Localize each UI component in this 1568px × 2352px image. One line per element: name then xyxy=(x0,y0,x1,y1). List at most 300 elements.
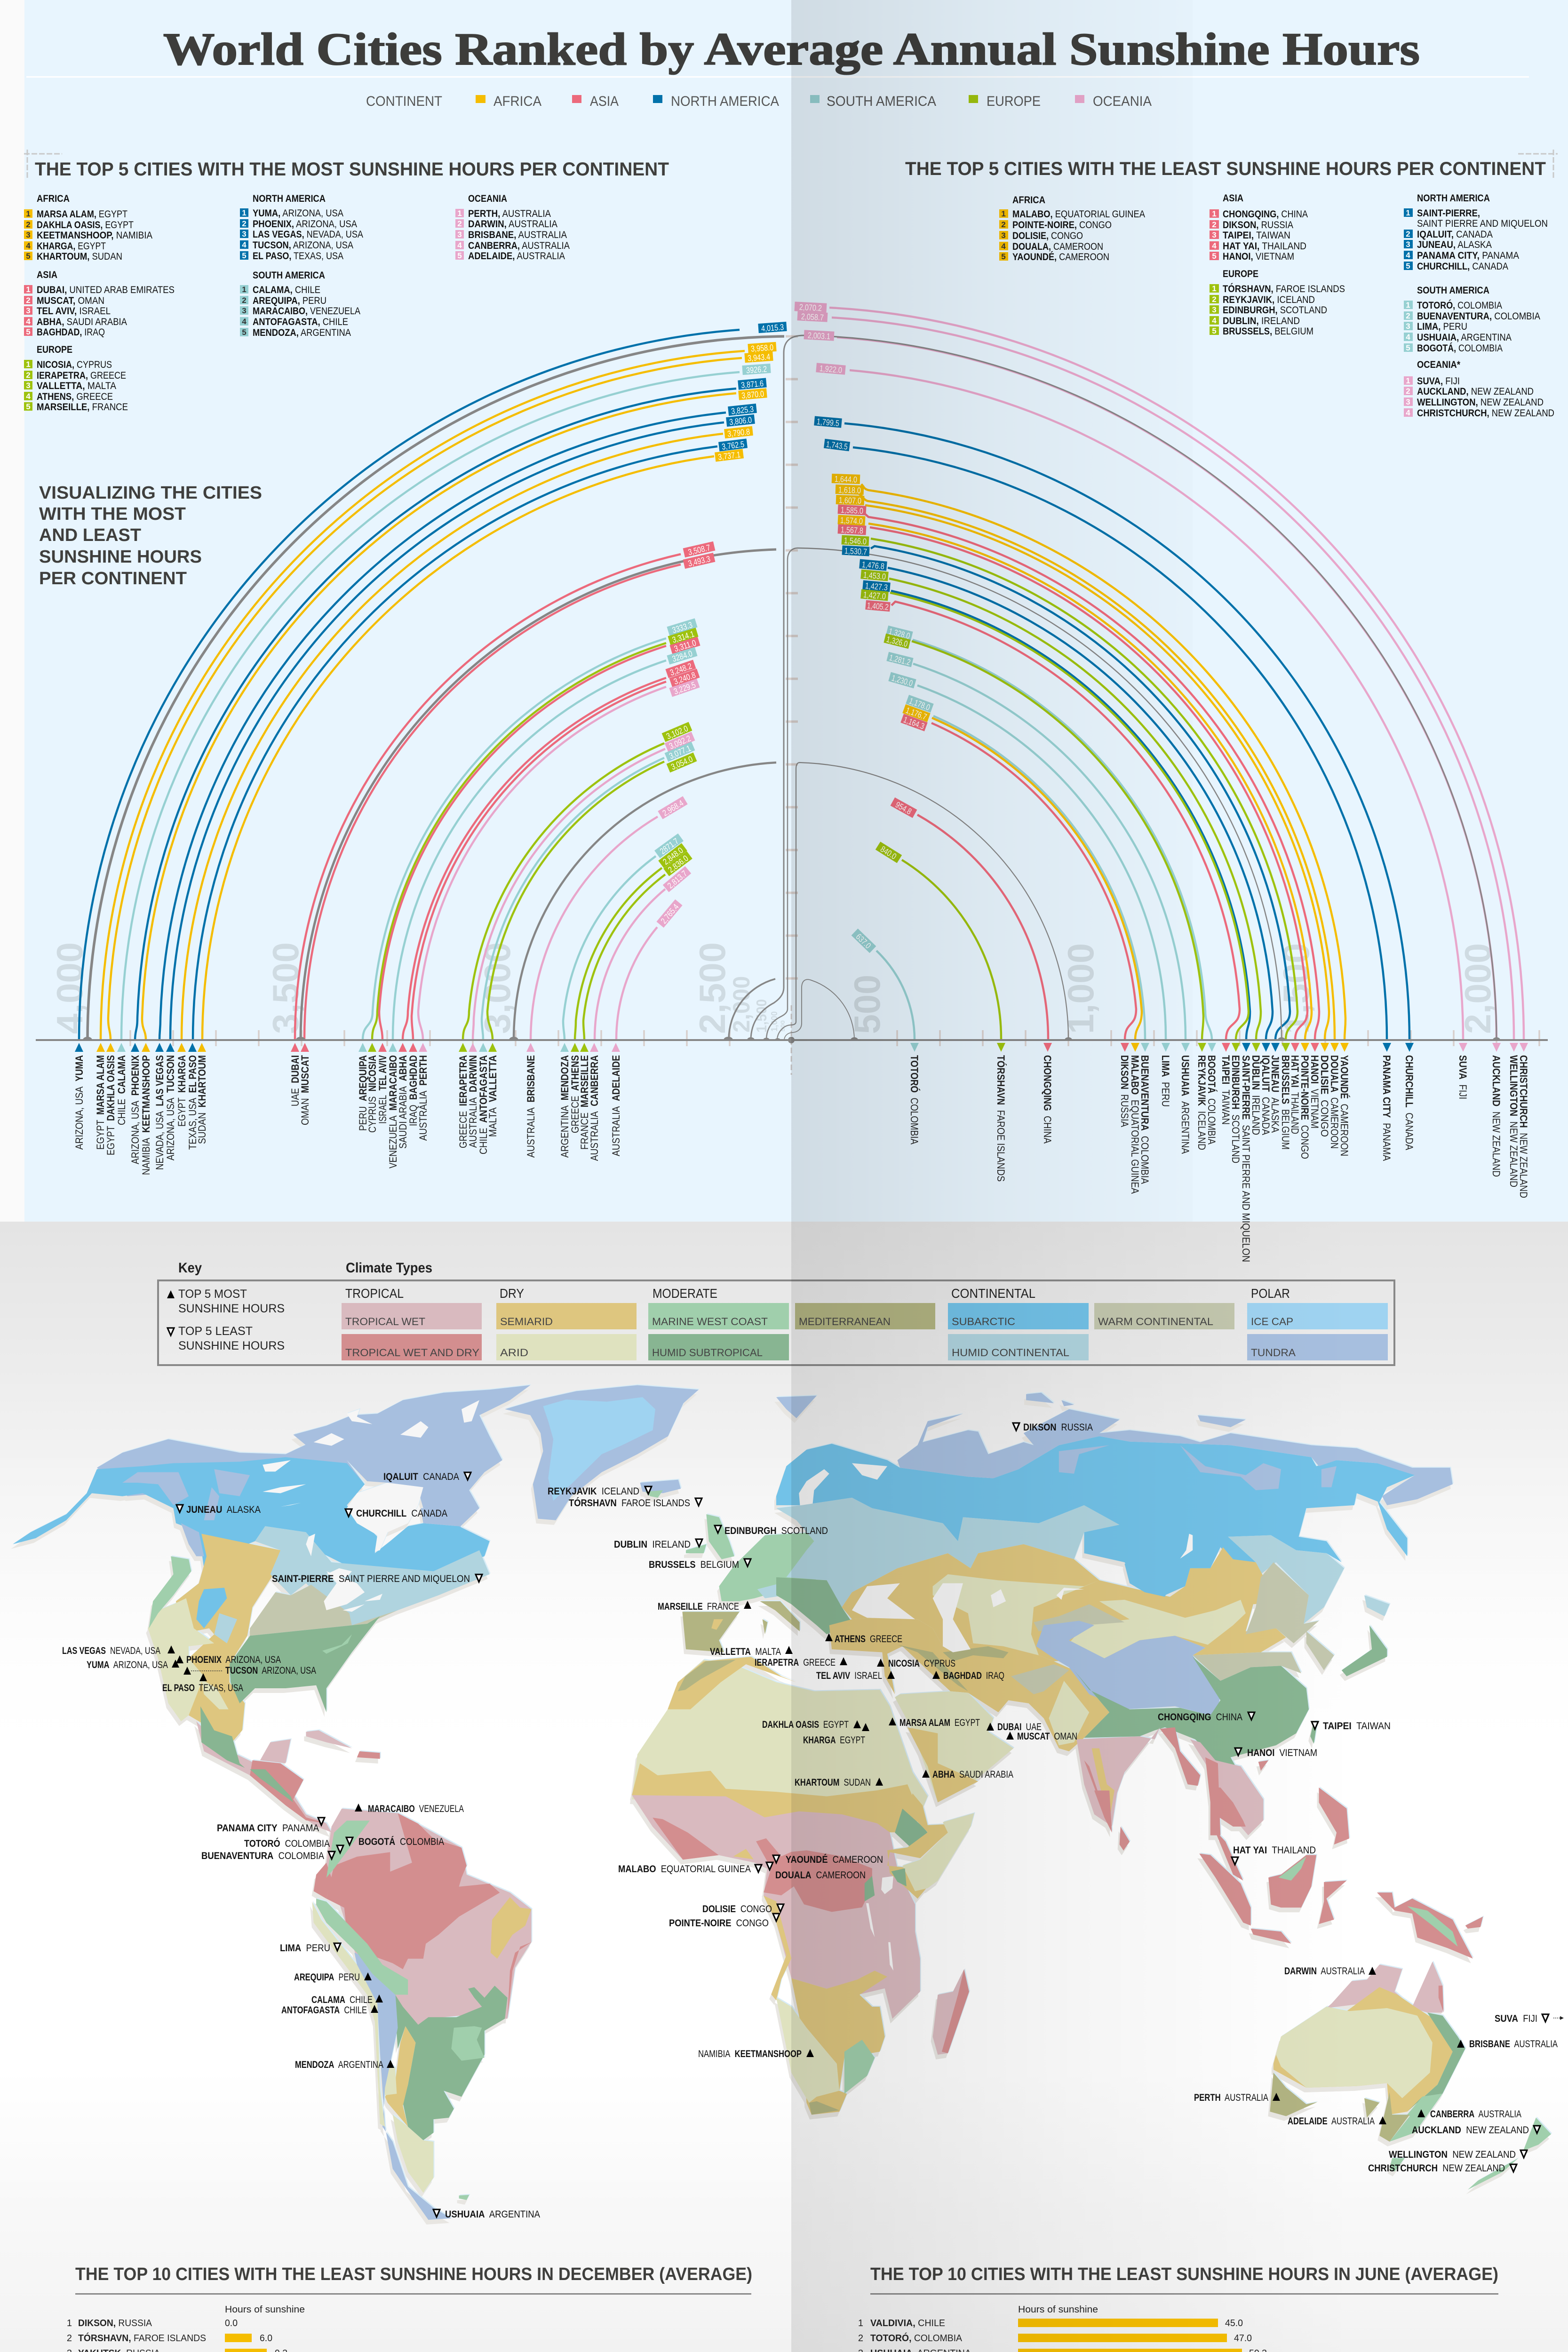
list: least sunshine, Europe: REYKJAVIK, ICELAND xyxy=(1223,294,1315,305)
value labels: most sunshine: 3,102.0 xyxy=(665,723,689,741)
value labels: most sunshine: 3,229.5 xyxy=(672,680,697,696)
value labels: least sunshine: 1,427.0 xyxy=(863,590,886,601)
text block: visualizing xyxy=(39,483,262,588)
list: most sunshine, North America: 1 xyxy=(242,208,247,217)
map city labels: Americas: USHUAIA ARGENTINA xyxy=(445,2209,540,2220)
axis scale numerals: 2,500 xyxy=(692,942,733,1034)
map city labels: Americas: CALAMA CHILE xyxy=(311,1994,373,2005)
list: least sunshine, Africa: 4 xyxy=(1001,242,1006,251)
map city labels: Europe: NICOSIA CYPRUS xyxy=(888,1658,955,1669)
list: least sunshine, Oceania: 3 xyxy=(1406,397,1410,406)
climate types heading: Climate Types xyxy=(346,1260,432,1276)
vertical city labels: least sunshine: LIMA PERU xyxy=(1160,1055,1171,1107)
vertical city labels: least sunshine: SUVA FIJI xyxy=(1457,1055,1469,1099)
list: most sunshine, South America: 3 xyxy=(242,306,247,315)
value labels: least sunshine: 1,405.2 xyxy=(867,601,889,612)
value labels: least sunshine: 2,058.7 xyxy=(801,312,824,322)
value labels: most sunshine: 3,240.8 xyxy=(672,670,697,686)
key panel xyxy=(158,1280,1394,1365)
map city labels: Americas: PHOENIX ARIZONA, USA xyxy=(186,1654,281,1665)
list: most sunshine, Asia: 5 xyxy=(26,327,31,336)
vertical city labels: least sunshine: DOLISIE CONGO xyxy=(1319,1055,1330,1137)
list: most sunshine, Asia: 4 xyxy=(26,317,31,326)
list: most sunshine, Africa: KHARGA, EGYPT xyxy=(37,241,106,252)
list: least sunshine, North America: SAINT-PIERRE, xyxy=(1417,208,1480,219)
vertical city labels: most sunshine: OMAN MUSCAT xyxy=(299,1055,311,1125)
axis scale numerals: 1,000 xyxy=(1060,943,1101,1034)
list: most sunshine, North America: 3 xyxy=(242,230,247,238)
list: least sunshine, South America: 2 xyxy=(1406,311,1410,320)
heading: least sunshine in June: THE TOP 10 CITIES WITH THE LEAST SUNSHINE HOURS IN JUNE (AVERAGE) xyxy=(870,2265,1498,2284)
value labels: least sunshine xyxy=(794,302,934,954)
map city labels: Oceania: AUCKLAND NEW ZEALAND xyxy=(1412,2125,1529,2136)
list: least sunshine, South America: LIMA, PERU xyxy=(1417,321,1467,332)
vertical city labels: most sunshine: AUSTRALIA ADELAIDE xyxy=(610,1055,622,1156)
map city labels: Americas: LIMA PERU xyxy=(280,1943,330,1954)
title: World Cities Ranked by Average Annual Sunshine Hours xyxy=(163,24,1420,74)
list: most sunshine, Asia: 2 xyxy=(26,296,31,305)
legend: continent colours: CONTINENT xyxy=(366,94,442,109)
map city labels: Africa: DOLISIE CONGO xyxy=(702,1904,772,1915)
list: least sunshine, South America: BUENAVENTURA, COLOMBIA xyxy=(1417,311,1540,322)
value labels: most sunshine: 3333.3 xyxy=(671,620,693,635)
list: least sunshine, South America: 1 xyxy=(1406,301,1410,310)
value labels: least sunshine: 1,178.0 xyxy=(908,696,931,712)
list: least sunshine, South America: 3 xyxy=(1406,322,1410,331)
axis scale numerals: 1,000 xyxy=(770,1011,779,1032)
axis arrows: least sunshine xyxy=(910,1043,1528,1052)
climate swatches: TROPICAL WET xyxy=(345,1316,425,1327)
list: most sunshine, South America: CALAMA, CHILE xyxy=(253,285,320,295)
list: most sunshine, Oceania: 2 xyxy=(457,219,462,228)
map city labels: Oceania: BRISBANE AUSTRALIA xyxy=(1469,2039,1558,2050)
vertical city labels: most sunshine: ARGENTINA MENDOZA xyxy=(559,1055,571,1158)
value labels: most sunshine: 3,508.7 xyxy=(687,543,711,557)
grey scale arcs xyxy=(88,335,1496,1040)
climate swatches: TUNDRA xyxy=(1251,1347,1296,1359)
list: most sunshine, Africa xyxy=(24,193,152,262)
value labels: most sunshine: 3,314.1 xyxy=(671,629,695,645)
legend: continent colours: ASIA xyxy=(590,94,619,109)
list: most sunshine, Europe: 1 xyxy=(26,360,31,369)
list: most sunshine, North America xyxy=(240,193,363,262)
heading: least sunshine in December: THE TOP 10 CITIES WITH THE LEAST SUNSHINE HOURS IN DECEMBER (AVERAGE) xyxy=(75,2265,752,2284)
axis arrows: most sunshine xyxy=(75,1043,620,1052)
axis scale numerals: 3,000 xyxy=(477,942,518,1034)
list: most sunshine, South America xyxy=(240,270,360,338)
map city labels: Asia: ABHA SAUDI ARABIA xyxy=(932,1769,1013,1780)
map city labels: Europe: TÓRSHAVN FAROE ISLANDS xyxy=(569,1497,690,1509)
page background: map panel xyxy=(0,1222,1568,2352)
list: most sunshine, Europe: VALLETTA, MALTA xyxy=(37,381,116,391)
list: most sunshine, Europe: 5 xyxy=(26,402,31,411)
vertical city labels: most sunshine: AUSTRALIA BRISBANE xyxy=(525,1055,537,1158)
axis scale numerals: 500 xyxy=(780,1020,786,1032)
vertical city labels: most sunshine xyxy=(73,1055,622,1175)
vertical city labels: most sunshine: MALTA VALLETTA xyxy=(487,1055,499,1137)
vertical city labels: least sunshine: WELLINGTON NEW ZEALAND xyxy=(1508,1055,1520,1187)
map city labels: Asia: HANOI VIETNAM xyxy=(1247,1748,1317,1758)
list: most sunshine, South America: MARACAIBO, VENEZUELA xyxy=(253,306,360,317)
list: most sunshine, North America: 4 xyxy=(242,240,247,249)
list: most sunshine, Africa: 5 xyxy=(26,252,31,261)
list: least sunshine, Europe: 2 xyxy=(1212,295,1217,304)
bar chart: June: VALDIVIA, CHILE xyxy=(870,2318,945,2328)
map city labels: Americas: YUMA ARIZONA, USA xyxy=(87,1660,168,1670)
list: most sunshine, Asia: DUBAI, UNITED ARAB EMIRATES xyxy=(37,285,175,295)
list: least sunshine, Africa: 2 xyxy=(1001,220,1006,229)
axis scale numerals: 500 xyxy=(846,975,888,1034)
vertical city labels: least sunshine xyxy=(908,1055,1529,1262)
list: least sunshine, Oceania xyxy=(1404,359,1554,419)
value labels: least sunshine: 1,281.2 xyxy=(888,653,911,667)
list: least sunshine, North America: PANAMA CITY, PANAMA xyxy=(1417,250,1519,261)
vertical city labels: least sunshine: USHUAIA ARGENTINA xyxy=(1179,1055,1191,1154)
list: least sunshine, Oceania: SUVA, FIJI xyxy=(1417,376,1460,387)
value labels: most sunshine: 3,311.0 xyxy=(673,638,697,654)
list: most sunshine, Asia: BAGHDAD, IRAQ xyxy=(37,327,105,338)
value labels: most sunshine: 3,077.1 xyxy=(668,743,692,761)
vertical city labels: least sunshine: BUENAVENTURA COLOMBIA xyxy=(1139,1055,1151,1184)
vertical city labels: least sunshine: HAT YAI THAILAND xyxy=(1289,1055,1301,1134)
list: most sunshine, South America: MENDOZA, ARGENTINA xyxy=(253,327,351,338)
value labels: least sunshine: 1,922.0 xyxy=(819,364,843,375)
text block: visualizing: WITH THE MOST xyxy=(39,504,186,524)
climate category headings: POLAR xyxy=(1251,1286,1290,1301)
list: least sunshine, North America: 5 xyxy=(1406,262,1410,270)
map city labels: Americas: AREQUIPA PERU xyxy=(294,1972,360,1983)
vertical city labels: most sunshine: EGYPT MARSA ALAM xyxy=(95,1055,106,1150)
list: most sunshine, Asia: ASIA xyxy=(37,270,57,280)
list: least sunshine, Europe: 5 xyxy=(1212,326,1217,335)
key heading: Key xyxy=(178,1260,202,1276)
vertical city labels: most sunshine: CHILE ANTOFAGASTA xyxy=(478,1055,489,1154)
map city labels: Africa: YAOUNDÉ CAMEROON xyxy=(786,1854,883,1865)
list: most sunshine, Africa: MARSA ALAM, EGYPT xyxy=(37,209,127,220)
value labels: most sunshine: 2871.7 xyxy=(658,836,680,856)
climate category headings xyxy=(345,1286,1290,1301)
list: least sunshine, Africa: 3 xyxy=(1001,231,1006,240)
vertical city labels: least sunshine: TÓRSHAVN FAROE ISLANDS xyxy=(995,1055,1007,1182)
climate swatches: MEDITERRANEAN xyxy=(799,1316,891,1327)
value labels: least sunshine: 954.8 xyxy=(894,800,913,816)
value labels: least sunshine: 1,176.7 xyxy=(905,706,928,722)
list: most sunshine, North America: 5 xyxy=(242,251,247,260)
vertical city labels: most sunshine: UAE DUBAI xyxy=(289,1055,301,1106)
map city labels: Americas: BUENAVENTURA COLOMBIA xyxy=(201,1851,324,1861)
map city labels: Americas: LAS VEGAS NEVADA, USA xyxy=(62,1645,160,1656)
map city labels: Europe: ATHENS GREECE xyxy=(835,1634,902,1645)
list: most sunshine, Africa: KHARTOUM, SUDAN xyxy=(37,251,122,262)
bar chart: December: 2 xyxy=(67,2333,72,2344)
map city labels: Americas: SAINT-PIERRE SAINT PIERRE AND MIQUELON xyxy=(272,1573,470,1584)
map city labels: Africa xyxy=(618,1717,980,2059)
vertical city labels: most sunshine: NEVADA, USA LAS VEGAS xyxy=(154,1055,166,1170)
bar chart: December xyxy=(62,2304,362,2352)
vertical city labels: least sunshine: DUBLIN IRELAND xyxy=(1250,1055,1262,1135)
list: least sunshine, Africa: AFRICA xyxy=(1012,195,1045,206)
list: least sunshine, North America: CHURCHILL, CANADA xyxy=(1417,261,1508,272)
axis scale numerals: 4,000 xyxy=(49,942,90,1034)
map city labels: Africa: MARSA ALAM EGYPT xyxy=(899,1717,980,1728)
list: least sunshine, Oceania: AUCKLAND, NEW ZEALAND xyxy=(1417,386,1534,397)
bar chart: December: DIKSON, RUSSIA xyxy=(78,2318,152,2328)
vertical city labels: most sunshine: EGYPT DAKHLA OASIS xyxy=(105,1055,117,1155)
map city labels: Africa: MALABO EQUATORIAL GUINEA xyxy=(618,1864,751,1875)
list: least sunshine, Asia: DIKSON, RUSSIA xyxy=(1223,220,1293,230)
list: least sunshine, Europe: DUBLIN, IRELAND xyxy=(1223,316,1300,326)
bar chart: June: 45.0 xyxy=(1225,2318,1243,2328)
map city labels: Americas: TUCSON ARIZONA, USA xyxy=(225,1665,316,1676)
list: most sunshine, South America: SOUTH AMERICA xyxy=(253,270,325,281)
map city labels: Africa: POINTE-NOIRE CONGO xyxy=(669,1918,769,1929)
vertical city labels: least sunshine: YAOUNDÉ CAMEROON xyxy=(1338,1055,1350,1156)
list: most sunshine, Europe xyxy=(24,344,128,413)
value labels: least sunshine: 1,476.8 xyxy=(861,560,885,571)
list: least sunshine, North America: 2 xyxy=(1406,230,1410,238)
value labels: least sunshine: 1,607.0 xyxy=(839,495,861,506)
map city labels: Europe: MARSEILLE FRANCE xyxy=(658,1601,739,1612)
list: most sunshine, Oceania: ADELAIDE, AUSTRALIA xyxy=(468,251,565,262)
map: Eurasia xyxy=(776,1393,1453,1836)
map city labels: Europe: REYKJAVIK ICELAND xyxy=(548,1486,639,1497)
list: most sunshine, North America: TUCSON, ARIZONA, USA xyxy=(253,240,353,251)
key: top 5 most: TOP 5 MOST xyxy=(178,1287,247,1301)
list: least sunshine, Oceania: 1 xyxy=(1406,376,1410,385)
list: most sunshine, Asia: ABHA, SAUDI ARABIA xyxy=(37,317,127,327)
vertical city labels: most sunshine: AUSTRALIA DARWIN xyxy=(467,1055,479,1148)
value labels: least sunshine: 2,003.1 xyxy=(807,331,830,341)
vertical city labels: least sunshine: MALABO EQUATORIAL GUINEA xyxy=(1129,1055,1141,1194)
legend: continent colours: AFRICA xyxy=(493,94,541,109)
list: least sunshine, Asia: 1 xyxy=(1212,209,1217,218)
vertical city labels: least sunshine: TOTORÓ COLOMBIA xyxy=(908,1055,920,1144)
map city labels: Asia: DIKSON RUSSIA xyxy=(1023,1422,1093,1433)
vertical city labels: most sunshine: SAUDI ARABIA ABHA xyxy=(397,1055,409,1149)
value labels: least sunshine: 1,585.0 xyxy=(840,505,863,516)
climate swatches: ICE CAP xyxy=(1251,1316,1293,1327)
axis scale numerals xyxy=(49,942,1498,1034)
key: top 5 least xyxy=(167,1325,285,1352)
map city labels: Americas: MARACAIBO VENEZUELA xyxy=(368,1804,464,1814)
list: most sunshine, Asia: 3 xyxy=(26,306,31,315)
map city labels: Oceania: PERTH AUSTRALIA xyxy=(1194,2092,1268,2103)
list: least sunshine, South America: SOUTH AMERICA xyxy=(1417,285,1489,296)
text block: visualizing: VISUALIZING THE CITIES xyxy=(39,483,262,503)
map city labels: Africa: DAKHLA OASIS EGYPT xyxy=(762,1719,849,1730)
list: most sunshine, South America: ANTOFAGASTA, CHILE xyxy=(253,317,348,327)
value labels: most sunshine: 3926.2 xyxy=(746,364,767,375)
list: most sunshine, Asia: TEL AVIV, ISRAEL xyxy=(37,306,111,317)
key: top 5 least: TOP 5 LEAST xyxy=(178,1325,253,1338)
legend: continent colours: NORTH AMERICA xyxy=(671,94,779,109)
value labels: least sunshine: 1,427.3 xyxy=(865,581,888,592)
list: most sunshine, Oceania: OCEANIA xyxy=(468,193,507,204)
value labels: least sunshine: 1,530.7 xyxy=(844,546,867,556)
map city labels: Asia: TAIPEI TAIWAN xyxy=(1323,1721,1391,1732)
list: most sunshine, Oceania: CANBERRA, AUSTRALIA xyxy=(468,240,570,251)
value labels: least sunshine: 1,743.5 xyxy=(826,439,848,452)
vertical city labels: least sunshine: CHURCHILL CANADA xyxy=(1403,1055,1415,1150)
list: least sunshine, South America: 5 xyxy=(1406,343,1410,352)
axis scale numerals: 1,500 xyxy=(1275,943,1317,1034)
vertical city labels: least sunshine: REYKJAVIK ICELAND xyxy=(1196,1055,1208,1150)
vertical city labels: most sunshine: ISRAEL TEL AVIV xyxy=(377,1055,389,1124)
list: most sunshine, North America: PHOENIX, ARIZONA, USA xyxy=(253,219,357,230)
bar chart: June xyxy=(853,2304,1477,2352)
vertical city labels: least sunshine: DIKSON RUSSIA xyxy=(1119,1055,1130,1127)
value labels: least sunshine: 1,546.0 xyxy=(844,536,867,546)
list: most sunshine, North America: EL PASO, TEXAS, USA xyxy=(253,251,343,262)
list: least sunshine, North America: 3 xyxy=(1406,240,1410,249)
arcs: least sunshine xyxy=(829,308,1524,1040)
value labels: least sunshine: 1,567.8 xyxy=(840,525,863,535)
vertical city labels: most sunshine: FRANCE MARSEILLE xyxy=(579,1055,590,1150)
value labels: most sunshine: 3,790.8 xyxy=(727,427,750,438)
key: top 5 least: SUNSHINE HOURS xyxy=(178,1339,285,1352)
value labels: most sunshine: 3,871.6 xyxy=(740,379,764,390)
value labels: least sunshine: 2,070.2 xyxy=(799,302,822,313)
list: least sunshine, Europe: BRUSSELS, BELGIUM xyxy=(1223,326,1313,337)
vertical city labels: least sunshine: AUCKLAND NEW ZEALAND xyxy=(1490,1055,1502,1177)
vertical city labels: least sunshine: SAINT-PIERRE SAINT PIERRE AND MIQUELON xyxy=(1240,1055,1252,1262)
vertical city labels: most sunshine: CYPRUS NICOSIA xyxy=(366,1055,378,1133)
legend: continent colours: EUROPE xyxy=(987,94,1041,109)
list: most sunshine, Europe: 2 xyxy=(26,371,31,380)
key: top 5 most xyxy=(167,1287,285,1315)
list: most sunshine, Africa: DAKHLA OASIS, EGYPT xyxy=(37,220,134,230)
map city labels: Americas: MENDOZA ARGENTINA xyxy=(295,2059,383,2070)
list: most sunshine, North America: YUMA, ARIZONA, USA xyxy=(253,208,343,219)
climate swatches: SEMIARID xyxy=(500,1316,553,1327)
value labels: least sunshine: 637.0 xyxy=(854,932,873,950)
climate swatches: HUMID SUBTROPICAL xyxy=(652,1347,763,1359)
vertical city labels: most sunshine: TEXAS, USA EL PASO xyxy=(187,1055,199,1150)
list: least sunshine, Europe: 3 xyxy=(1212,305,1217,314)
value labels: most sunshine: 2,813.7 xyxy=(666,869,689,890)
legend: continent colours: SOUTH AMERICA xyxy=(827,94,936,109)
page background: sky panel xyxy=(0,0,1568,1222)
list: least sunshine, Asia: ASIA xyxy=(1223,193,1243,204)
value labels: most sunshine: 3,493.3 xyxy=(687,554,711,568)
bar chart: December: Hours of sunshine xyxy=(225,2304,305,2315)
list: most sunshine, Asia xyxy=(24,270,175,338)
list: most sunshine, Africa: KEETMANSHOOP, NAMIBIA xyxy=(37,230,152,241)
map city labels: Oceania: SUVA FIJI xyxy=(1495,2013,1537,2024)
list: most sunshine, North America: LAS VEGAS, NEVADA, USA xyxy=(253,229,363,240)
list: least sunshine, North America: NORTH AMERICA xyxy=(1417,193,1490,204)
list: least sunshine, South America: USHUAIA, ARGENTINA xyxy=(1417,332,1512,343)
vertical city labels: most sunshine: ARIZONA, USA PHOENIX xyxy=(129,1055,141,1164)
value labels: least sunshine: 1,326.0 xyxy=(885,635,908,649)
map city labels: Americas: BOGOTÁ COLOMBIA xyxy=(358,1836,444,1847)
vertical city labels: least sunshine: JUNEAU ALASKA xyxy=(1269,1055,1281,1133)
list: least sunshine, Africa: 1 xyxy=(1001,209,1006,218)
list: most sunshine, Europe: 4 xyxy=(26,392,31,401)
climate swatches xyxy=(342,1303,1388,1360)
vertical city labels: least sunshine: PANAMA CITY PANAMA xyxy=(1381,1055,1393,1161)
list: most sunshine, Africa: AFRICA xyxy=(37,193,70,204)
list: most sunshine, Europe: EUROPE xyxy=(37,344,72,355)
value labels: least sunshine: 1,799.5 xyxy=(816,417,840,428)
map city labels: Oceania: CHRISTCHURCH NEW ZEALAND xyxy=(1368,2163,1505,2174)
axis scale numerals: 1,500 xyxy=(753,999,770,1033)
value labels: most sunshine: 4,015.3 xyxy=(761,322,784,334)
map city labels: Oceania xyxy=(1194,1966,1564,2174)
map city labels: Asia xyxy=(816,1422,1391,1865)
list: most sunshine, Oceania: BRISBANE, AUSTRALIA xyxy=(468,230,567,240)
vertical city labels: least sunshine: BOGOTÁ COLOMBIA xyxy=(1206,1055,1218,1144)
vertical city labels: most sunshine: IRAQ BAGHDAD xyxy=(407,1055,419,1126)
value labels: least sunshine: 1,230.0 xyxy=(891,673,914,688)
vertical city labels: most sunshine: EGYPT KHARGA xyxy=(176,1055,188,1127)
map city labels: Asia: BAGHDAD IRAQ xyxy=(943,1670,1004,1681)
text block: visualizing: PER CONTINENT xyxy=(39,569,187,588)
value labels: least sunshine: 840.0 xyxy=(879,844,898,861)
list: least sunshine, Asia: CHONGQING, CHINA xyxy=(1223,209,1308,220)
value labels: most sunshine: 3,806.0 xyxy=(729,415,752,427)
list: least sunshine, Asia: 4 xyxy=(1212,241,1217,250)
map city labels: Europe: VALLETTA MALTA xyxy=(710,1646,781,1657)
list: least sunshine, North America xyxy=(1404,193,1548,272)
map city labels: Oceania: DARWIN AUSTRALIA xyxy=(1284,1966,1365,1977)
map city labels: Americas xyxy=(62,1471,540,2220)
list: least sunshine, Asia: HAT YAI, THAILAND xyxy=(1223,241,1306,252)
horizontal axis xyxy=(36,1037,1548,1043)
value labels: most sunshine xyxy=(654,322,787,928)
list: most sunshine, South America: 5 xyxy=(242,328,247,337)
bar chart: December: TÓRSHAVN, FAROE ISLANDS xyxy=(78,2332,206,2344)
list: most sunshine, North America: 2 xyxy=(242,219,247,228)
value labels: most sunshine: 3,870.0 xyxy=(741,389,764,400)
climate swatches: MARINE WEST COAST xyxy=(652,1316,768,1327)
list: least sunshine, Europe: 4 xyxy=(1212,316,1217,325)
list: least sunshine, Asia: 3 xyxy=(1212,230,1217,239)
list: least sunshine, Europe xyxy=(1210,269,1345,337)
list: most sunshine, South America: AREQUIPA, PERU xyxy=(253,295,326,306)
list: least sunshine, Asia: 5 xyxy=(1212,252,1217,261)
value labels: most sunshine: 2,848.0 xyxy=(661,845,685,866)
list: least sunshine, North America: SAINT PIERRE AND MIQUELON xyxy=(1417,218,1548,229)
vertical city labels: least sunshine: DOUALA CAMEROON xyxy=(1329,1055,1340,1149)
list: least sunshine, Asia: 2 xyxy=(1212,220,1217,229)
map city labels: Oceania: CANBERRA AUSTRALIA xyxy=(1430,2109,1521,2120)
legend: continent colours xyxy=(366,94,1152,109)
list: least sunshine, Africa: MALABO, EQUATORIAL GUINEA xyxy=(1012,209,1145,220)
map city labels: Europe: DUBLIN IRELAND xyxy=(614,1539,691,1550)
list: least sunshine, Africa xyxy=(999,195,1145,262)
map: South-East Asia and Oceania xyxy=(1094,1788,1551,2190)
value labels: most sunshine: 2,765.4 xyxy=(659,902,681,925)
key: top 5 most: SUNSHINE HOURS xyxy=(178,1302,285,1315)
vertical city labels: most sunshine: PERU AREQUIPA xyxy=(357,1055,369,1131)
map city labels: Asia: CHONGQING CHINA xyxy=(1158,1712,1242,1723)
list: most sunshine, Oceania: 3 xyxy=(457,230,462,239)
list: least sunshine, South America: TOTORÓ, COLOMBIA xyxy=(1417,300,1502,311)
climate swatches: WARM CONTINENTAL xyxy=(1098,1316,1213,1327)
vertical city labels: least sunshine: EDINBURGH SCOTLAND xyxy=(1230,1055,1242,1163)
map city labels: Europe: BRUSSELS BELGIUM xyxy=(649,1559,739,1570)
map city labels: Oceania: ADELAIDE AUSTRALIA xyxy=(1288,2116,1375,2127)
list: least sunshine, Oceania: CHRISTCHURCH, NEW ZEALAND xyxy=(1417,408,1554,419)
vertical city labels: most sunshine: AUSTRALIA CANBERRA xyxy=(589,1055,600,1161)
value labels: least sunshine: 1,618.0 xyxy=(838,485,861,495)
climate swatches: SUBARCTIC xyxy=(952,1316,1015,1327)
vertical city labels: most sunshine: NAMIBIA KEETMANSHOOP xyxy=(140,1055,152,1175)
climate swatches: TROPICAL WET AND DRY xyxy=(345,1347,479,1359)
vertical city labels: least sunshine: HANOI VIETNAM xyxy=(1309,1055,1321,1128)
bar chart: June: 1 xyxy=(858,2318,863,2328)
